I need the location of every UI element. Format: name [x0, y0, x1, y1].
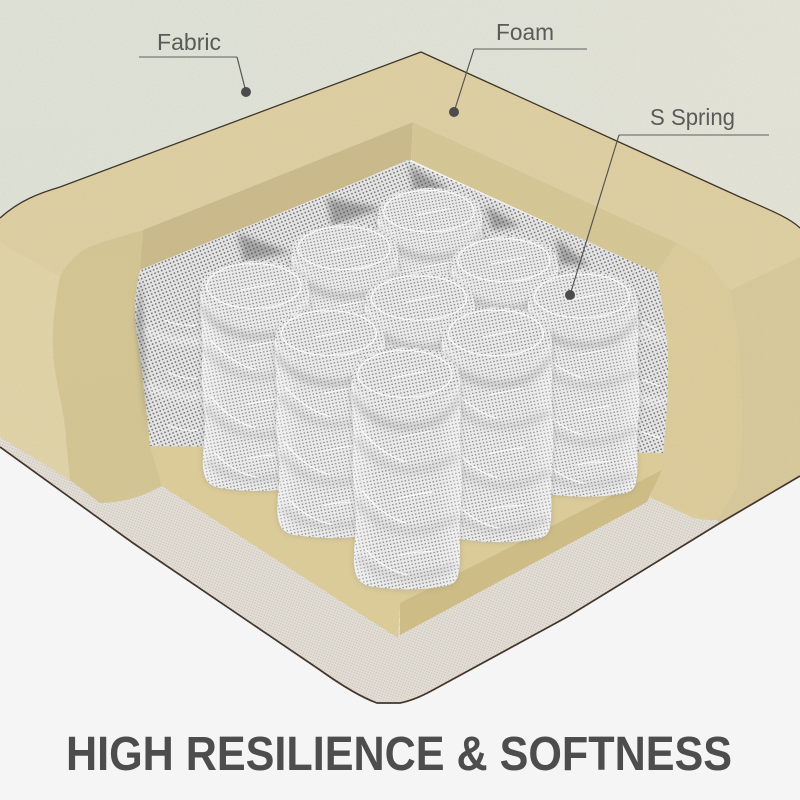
spring row 4 left [275, 308, 386, 538]
mattress outline top [0, 52, 800, 228]
label: Fabric: Fabric [157, 29, 221, 55]
spring front [351, 347, 462, 589]
label: Fabric [139, 29, 251, 97]
spring row 4 right [442, 307, 553, 542]
label: Foam [449, 19, 587, 117]
spring row 3 center [365, 273, 476, 501]
foam left outer face [0, 243, 70, 480]
fabric surface background [0, 0, 800, 230]
spring row 3 right [528, 271, 639, 497]
spring row 1 [377, 188, 484, 401]
spring row 2 left [291, 224, 400, 445]
foam speckle texture [0, 50, 800, 530]
bottom foam slab side [400, 470, 662, 635]
foam back band left [140, 122, 413, 270]
label: Foam: Foam [496, 19, 554, 45]
foam right cut wall [650, 243, 742, 520]
foam left cut wall [53, 230, 162, 503]
bottom fabric strip [0, 218, 800, 703]
spring row 3 left [200, 261, 311, 491]
foam back band right [411, 122, 677, 273]
label: S Spring [565, 104, 769, 300]
mattress outline bottom [0, 447, 800, 703]
foam top surface [0, 52, 800, 290]
spring row 2 right [451, 236, 560, 457]
label: S Spring: S Spring [650, 104, 735, 130]
bottom foam slab top surface [150, 446, 663, 638]
title: HIGH RESILIENCE & SOFTNESS [66, 728, 732, 781]
back spring netting [135, 160, 668, 455]
foam right outer face [717, 257, 800, 523]
